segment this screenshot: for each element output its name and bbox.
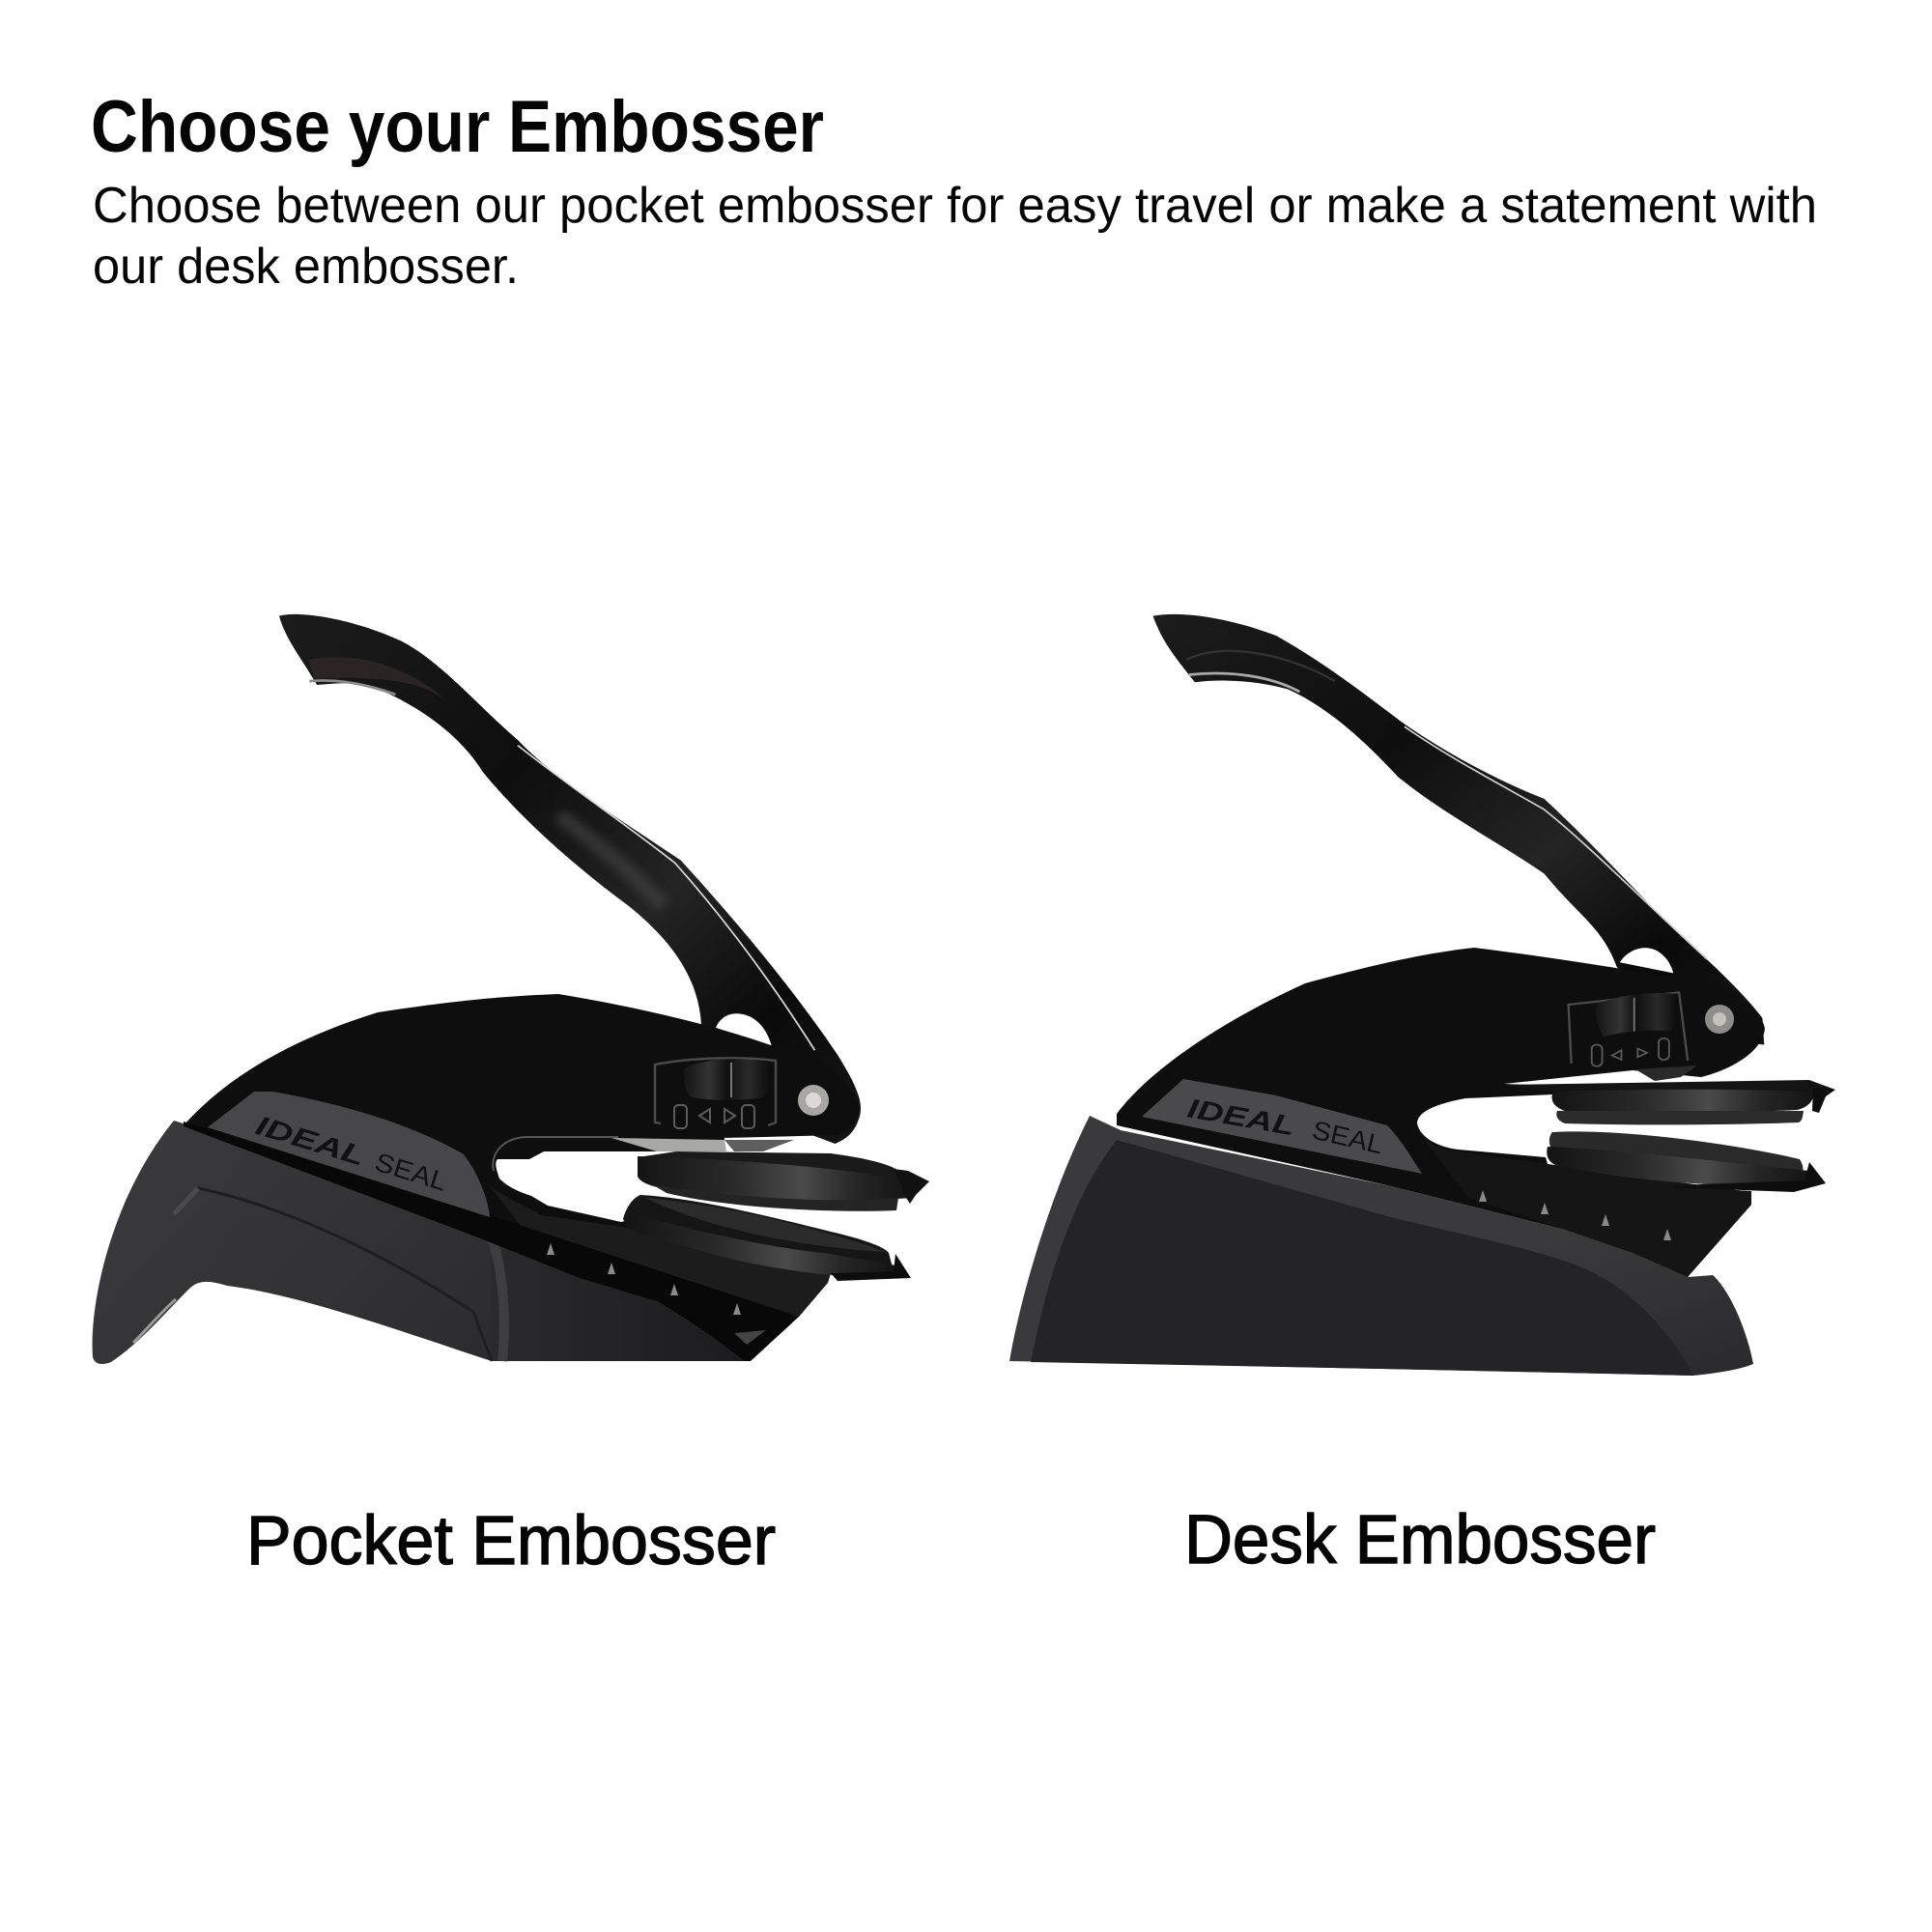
desk triangle markers <box>1479 1190 1671 1240</box>
pocket handle <box>279 614 861 1144</box>
pocket adjuster switch <box>655 1058 776 1128</box>
pocket black strip <box>184 1122 799 1361</box>
brand text pocket: IDEAL <box>252 1110 368 1172</box>
pocket silver plate <box>611 1138 794 1151</box>
pocket pivot pin <box>798 1085 829 1116</box>
intro text <box>93 178 1817 295</box>
desk pivot pin <box>1705 1005 1734 1034</box>
desk lower die <box>1547 1131 1826 1192</box>
title: Choose your Embosser <box>91 86 824 168</box>
desk brand plate <box>1142 1079 1422 1174</box>
desk pivot bump <box>1635 1065 1697 1081</box>
pocket lower grip <box>93 1121 744 1364</box>
pocket triangle markers <box>547 1243 741 1315</box>
pocket embosser <box>93 614 929 1364</box>
pocket body <box>184 994 859 1317</box>
pocket brand plate <box>208 1092 490 1217</box>
brand text pocket <box>252 1110 450 1197</box>
brand text pocket: SEAL <box>372 1148 450 1197</box>
label: pocket embosser: Pocket Embosser <box>246 1503 776 1579</box>
desk jaw shade <box>1425 1140 1751 1277</box>
intro text: our desk embosser. <box>93 239 519 295</box>
desk base <box>1009 1116 1753 1376</box>
pocket jaw outline <box>493 1137 618 1171</box>
desk upper die <box>1504 1080 1835 1124</box>
desk embosser <box>1009 614 1835 1376</box>
desk adjuster switch <box>1569 992 1688 1066</box>
desk body <box>1117 948 1765 1277</box>
brand text desk: IDEAL <box>1185 1093 1297 1141</box>
intro text: Choose between our pocket embosser for easy travel or make a statement with <box>93 178 1817 234</box>
label: desk embosser: Desk Embosser <box>1184 1502 1656 1578</box>
pocket upper die <box>638 1151 929 1211</box>
pocket lower die <box>623 1195 911 1281</box>
desk handle <box>1153 614 1764 1045</box>
brand text desk <box>1185 1093 1386 1159</box>
brand text desk: SEAL <box>1310 1116 1386 1159</box>
pocket jaw shade <box>488 1183 831 1317</box>
